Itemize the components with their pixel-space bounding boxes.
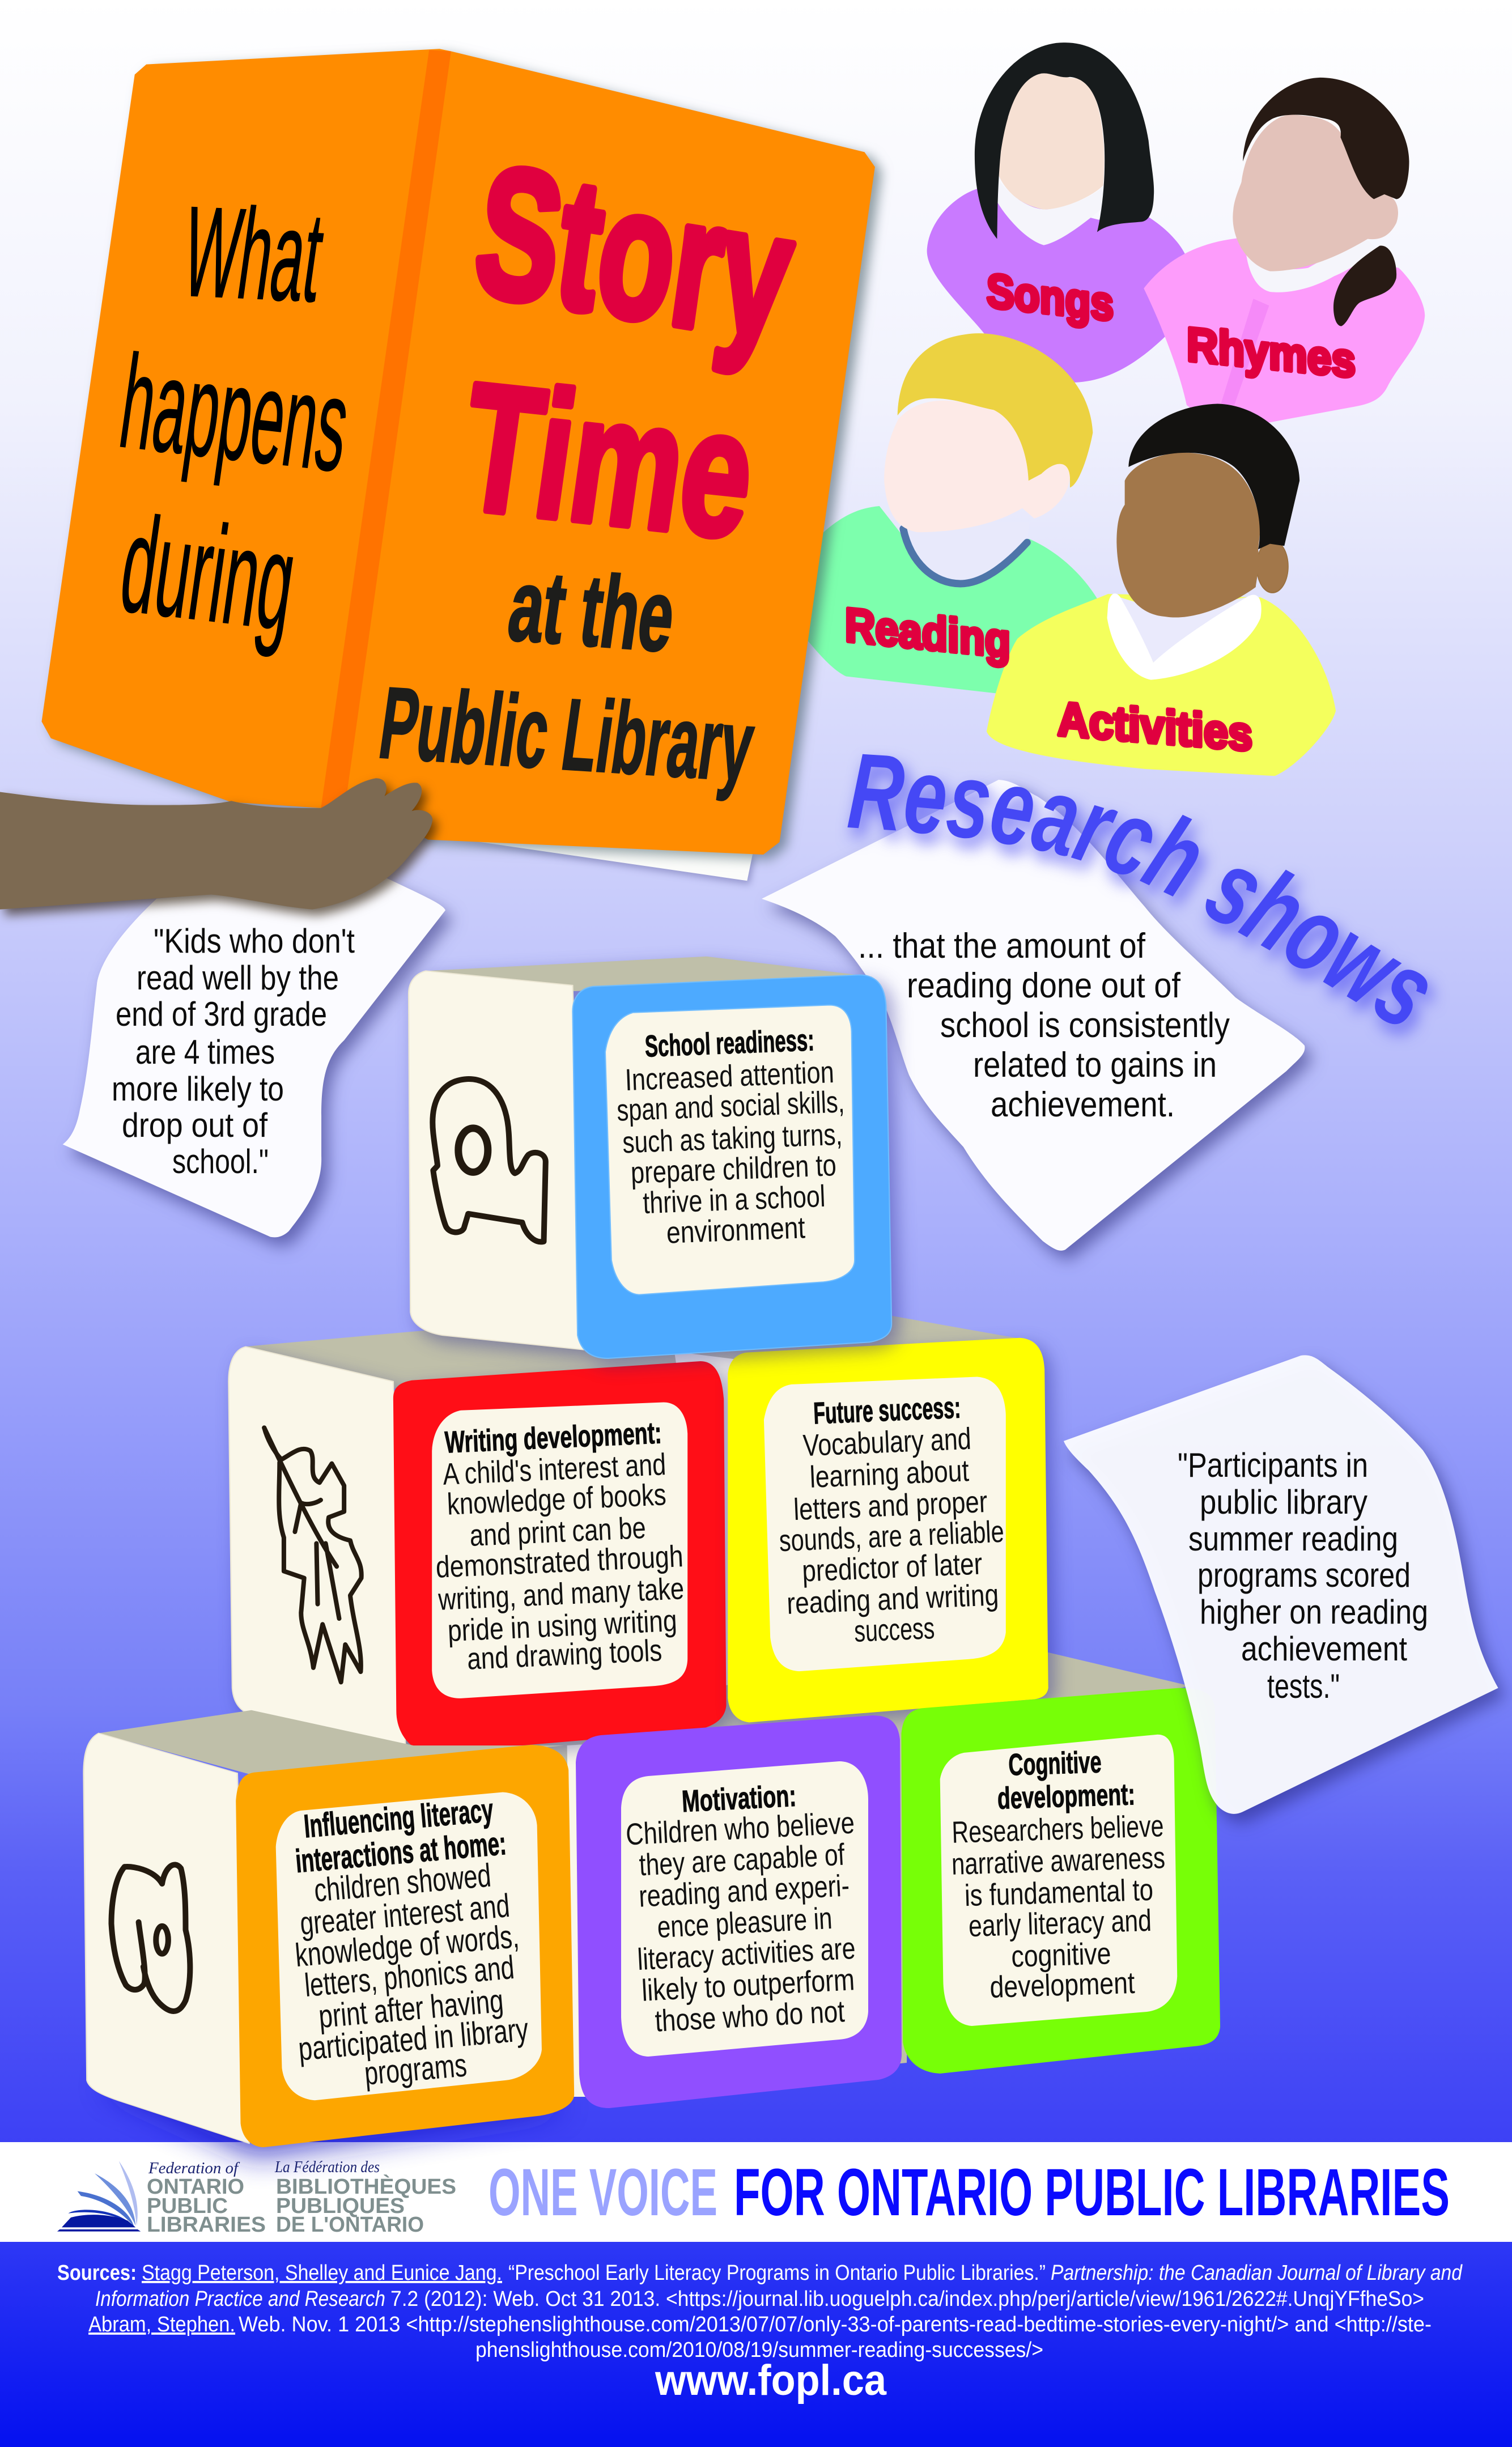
block text: motivation: likely to outperform	[641, 1962, 855, 2008]
block text: influencing literacy: greater interest and	[299, 1887, 511, 1942]
sources text: Partnership: the Canadian Journal of Library and	[1051, 2261, 1463, 2285]
label: Activities: Activities	[1057, 692, 1252, 761]
quote note: kids who don't read well	[63, 878, 445, 1237]
block: influencing literacy	[84, 1710, 574, 2147]
quote note: research amount of reading: reading done out of	[907, 966, 1181, 1005]
block text: writing development: writing, and many take	[437, 1571, 685, 1617]
block text: influencing literacy: programs	[363, 2046, 468, 2092]
block: motivation	[576, 1715, 902, 2108]
logo icon: open book	[57, 2161, 141, 2232]
block side with leaf icon	[228, 1347, 406, 1749]
block text: writing development: demonstrated through	[435, 1539, 684, 1584]
quote note: kids who don't read well: drop out of	[122, 1106, 267, 1144]
sources text: 7.2 (2012): Web. Oct 31 2013. <https://journal.lib.uoguelph.ca/index.php/perj/article/view/1961/2622#.UnqjYFfheSo>	[390, 2287, 1424, 2311]
quote note: research amount of reading	[762, 780, 1305, 1251]
block side with letter icon	[409, 971, 584, 1350]
child: Activities	[987, 403, 1336, 776]
icon: letter	[111, 1864, 190, 2011]
block text: cognitive development: early literacy and	[968, 1904, 1152, 1943]
block text: writing development	[435, 1416, 685, 1676]
block text: school readiness: prepare children to	[630, 1148, 837, 1190]
children group	[803, 43, 1425, 776]
sources text: phenslighthouse.com/2010/08/19/summer-reading-successes/>	[475, 2338, 1043, 2362]
sources text: Abram, Stephen.	[88, 2313, 235, 2336]
block text: future success: reading and writing	[786, 1578, 999, 1621]
block text: future success: learning about	[809, 1454, 970, 1494]
block: cognitive development	[901, 1688, 1220, 2074]
block text: motivation: literacy activities are	[636, 1931, 856, 1977]
quote note: summer reading programs: summer reading	[1188, 1520, 1398, 1558]
quote note: summer reading programs: higher on reading	[1200, 1593, 1428, 1631]
block: school readiness	[409, 957, 891, 1358]
logo text: La Fédération des	[274, 2159, 380, 2176]
block text: writing development: and drawing tools	[466, 1633, 662, 1676]
block: writing development	[228, 1347, 727, 1753]
block text: school readiness: environment	[666, 1210, 806, 1250]
block text: influencing literacy	[294, 1792, 530, 2092]
block text: motivation: Motivation:	[681, 1779, 797, 1819]
slogan: One Voice for Ontario Public Libraries	[489, 2155, 1450, 2230]
book page edge	[451, 838, 753, 881]
block text: influencing literacy: letters, phonics and	[303, 1949, 516, 2004]
block text: school readiness: such as taking turns,	[622, 1118, 843, 1159]
quote note: research amount of reading: ... that the amount of	[858, 927, 1146, 966]
block text: school readiness: School readiness:	[644, 1023, 815, 1064]
quote note: kids who don't read well: "Kids who don't	[154, 922, 355, 960]
quote note: kids who don't read well: school."	[172, 1142, 269, 1180]
book title: at the: at the	[503, 548, 682, 673]
sources text: “Preschool Early Literacy Programs in Ontario Public Libraries.”	[508, 2261, 1046, 2285]
sources text: Sources:	[57, 2261, 137, 2285]
child: Songs	[927, 43, 1187, 383]
block text: school readiness: span and social skills,	[616, 1085, 845, 1128]
slogan: One Voice for Ontario Public Libraries: ONE VOICE	[489, 2155, 717, 2230]
block text: future success: predictor of later	[801, 1547, 983, 1588]
book title: Public Library: Public Library	[373, 666, 761, 802]
block text: school readiness	[616, 1023, 845, 1250]
block text: writing development: knowledge of books	[447, 1477, 667, 1522]
block text: influencing literacy: print after having	[317, 1982, 505, 2035]
block text: influencing literacy: participated in library	[297, 2011, 530, 2068]
sources text: Information Practice and Research	[95, 2287, 385, 2311]
block text: cognitive development: narrative awareness	[951, 1841, 1166, 1881]
block text: motivation: ence pleasure in	[656, 1901, 833, 1944]
block text: influencing literacy: Influencing literacy	[303, 1792, 495, 1845]
block text: motivation: Children who believe	[625, 1805, 855, 1852]
icon: letter a	[432, 1079, 546, 1242]
white logo band	[0, 2142, 1512, 2242]
quote note: kids who don't read well: more likely to	[112, 1070, 284, 1108]
block text: motivation: those who do not	[654, 1994, 846, 2038]
block text: cognitive development: development	[989, 1966, 1135, 2004]
logo text: DE L'ONTARIO	[276, 2213, 424, 2237]
block text: future success: Future success:	[813, 1391, 961, 1430]
quote note: summer reading programs: programs scored	[1197, 1556, 1411, 1594]
quote note: summer reading programs	[1064, 1355, 1498, 1814]
block text: writing development: Writing development:	[444, 1416, 662, 1460]
book	[41, 49, 875, 881]
sources text: Stagg Peterson, Shelley and Eunice Jang.	[142, 2261, 502, 2285]
block text: cognitive development: Cognitive	[1008, 1745, 1102, 1782]
top faces behind block rows	[246, 1316, 1190, 2097]
block text: motivation	[625, 1779, 856, 2038]
logo text	[147, 2159, 456, 2237]
block text: influencing literacy: knowledge of words,	[294, 1918, 520, 1974]
block text: cognitive development: development:	[997, 1777, 1136, 1816]
block text: future success: success	[853, 1611, 935, 1649]
logo: Federation of Ontario Public Libraries	[57, 2159, 456, 2237]
icon: leaf	[264, 1428, 362, 1682]
label: Rhymes: Rhymes	[1187, 317, 1356, 388]
block: future success	[728, 1338, 1048, 1722]
quote note: kids who don't read well: read well by the	[137, 959, 339, 997]
quote note: research amount of reading: achievement.	[991, 1085, 1175, 1124]
quote note: research amount of reading: school is consistently	[940, 1006, 1230, 1045]
block text: cognitive development	[951, 1745, 1166, 2004]
footer background	[0, 2242, 1512, 2447]
book: happens	[112, 327, 357, 499]
logo text: Federation of	[148, 2160, 240, 2177]
shadow under blocks	[102, 2063, 567, 2156]
block text: future success	[779, 1391, 1005, 1649]
block text: school readiness: Increased attention	[625, 1055, 835, 1097]
block text: motivation: they are capable of	[638, 1838, 846, 1882]
quote note: research amount of reading: related to gains in	[973, 1046, 1217, 1085]
book covers	[41, 49, 875, 855]
sources text	[57, 2261, 1463, 2362]
block text: influencing literacy: children showed	[313, 1857, 492, 1909]
quote note: kids who don't read well: are 4 times	[135, 1033, 275, 1071]
quote note: summer reading programs: "Participants in	[1178, 1446, 1368, 1484]
block text: writing development: pride in using writing	[447, 1604, 678, 1648]
logo text: LIBRARIES	[147, 2213, 266, 2237]
logo text: BIBLIOTHÈQUES	[276, 2174, 456, 2199]
block text: school readiness: thrive in a school	[642, 1179, 826, 1220]
logo text: PUBLIQUES	[276, 2194, 405, 2218]
block text: motivation: reading and experi-	[638, 1868, 850, 1914]
heading: Research shows: Research shows	[843, 753, 1441, 1043]
block text: cognitive development: cognitive	[1011, 1936, 1111, 1974]
quote note: kids who don't read well: end of 3rd grade	[116, 995, 327, 1033]
logo text: PUBLIC	[147, 2194, 228, 2218]
label: Songs: Songs	[987, 264, 1114, 331]
block text: writing development: and print can be	[469, 1511, 647, 1553]
block text: future success: letters and proper	[793, 1485, 988, 1527]
block text: cognitive development: is fundamental to	[964, 1873, 1154, 1913]
logo text: ONTARIO	[147, 2175, 244, 2199]
arm and hand holding book	[0, 778, 432, 910]
block side with letter icon	[84, 1733, 249, 2143]
book title: Time: Time	[452, 346, 766, 576]
book: What	[175, 180, 332, 329]
book: during	[113, 487, 304, 660]
block text: future success: Vocabulary and	[802, 1422, 972, 1463]
quote note: summer reading programs: tests."	[1267, 1667, 1340, 1705]
quote note: summer reading programs: public library	[1200, 1483, 1367, 1521]
block text: influencing literacy: interactions at home:	[294, 1825, 508, 1880]
block text: writing development: A child's interest and	[442, 1447, 666, 1492]
website url: www.fopl.ca	[655, 2356, 887, 2404]
block text: cognitive development: Researchers believe	[952, 1809, 1164, 1850]
quote note: summer reading programs: achievement	[1241, 1630, 1407, 1668]
label: Reading: Reading	[845, 598, 1010, 668]
block text: future success: sounds, are a reliable	[779, 1515, 1005, 1558]
sources text: Web. Nov. 1 2013 <http://stephenslighthouse.com/2013/07/07/only-33-of-parents-read-bedtime-stories-every-night/> and <http://ste-	[239, 2313, 1432, 2336]
child: Reading	[803, 333, 1098, 694]
child: Rhymes	[1144, 78, 1425, 423]
book title: Story: Story	[465, 126, 805, 381]
